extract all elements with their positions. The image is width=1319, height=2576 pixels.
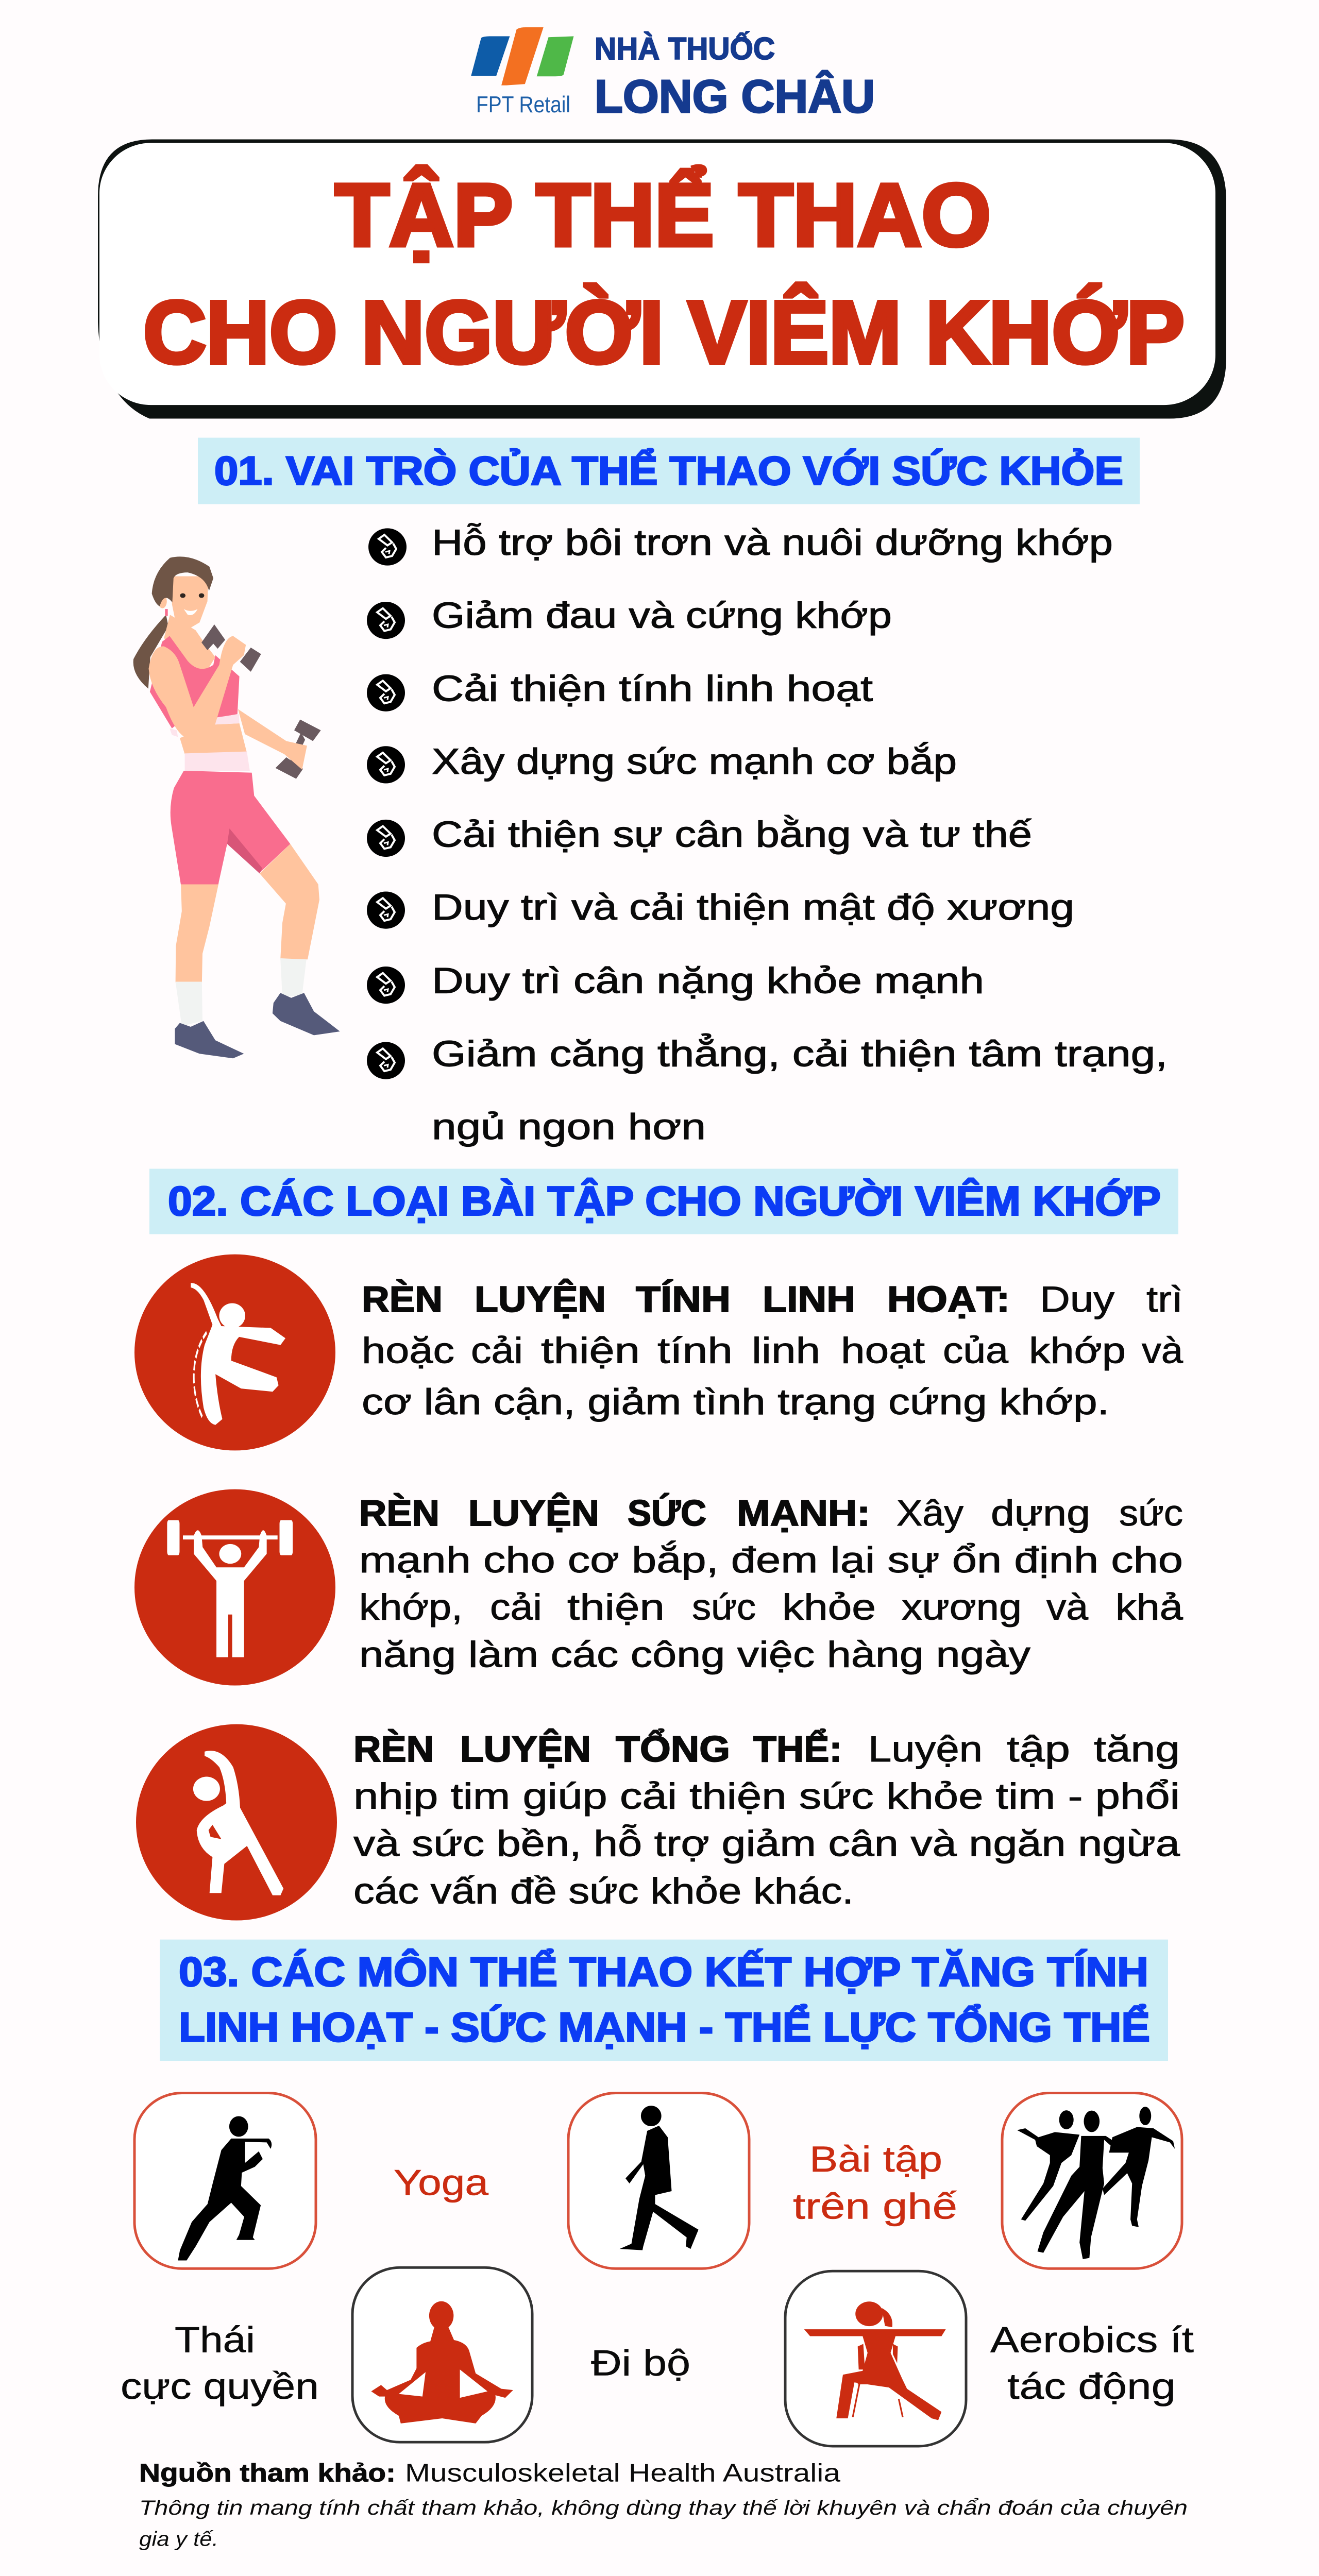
label: tai chi: cực quyền — [121, 2367, 319, 2407]
logo name line 1: NHÀ THUỐC — [595, 31, 775, 66]
text: overall training: tập — [1007, 1730, 1070, 1770]
text: flexibility training: TÍNH — [636, 1280, 731, 1320]
disclaimer: gia y tế. — [139, 2527, 218, 2550]
icon: bullet 2 — [367, 602, 405, 639]
text: flexibility training: cơ lân cận, giảm tình trạng cứng khớp. — [362, 1382, 1109, 1422]
icon: bullet 6 — [367, 891, 405, 929]
icon: bullet 1 — [368, 528, 407, 566]
benefit 8: ngủ ngon hơn — [432, 1107, 706, 1147]
text: flexibility training — [362, 1279, 1183, 1422]
logo: FPT Retail Long Châu — [471, 27, 875, 123]
text: strength training: RÈN — [359, 1494, 439, 1534]
text: strength training: khớp, — [359, 1587, 463, 1628]
heading: section 03 — [160, 1940, 1168, 2061]
text: strength training: sức — [692, 1587, 756, 1628]
label: tai chi: Thái — [175, 2320, 255, 2360]
icon: bullet 7 — [367, 967, 405, 1004]
source note: Nguồn tham khảo: — [139, 2459, 396, 2487]
text: overall training: THỂ: — [753, 1729, 842, 1770]
text: strength training: LUYỆN — [468, 1493, 599, 1534]
label: chair exercise: Bài tập — [809, 2140, 942, 2180]
text: overall training — [353, 1729, 1180, 1911]
illustration: woman with dumbbells — [133, 556, 340, 1058]
benefit 3: Cải thiện tính linh hoạt — [432, 669, 873, 709]
icon: overall fitness — [136, 1724, 337, 1921]
label: chair exercise — [793, 2140, 957, 2227]
heading: section 02 — [149, 1169, 1178, 1234]
benefit 7: Duy trì cân nặng khỏe mạnh — [432, 961, 984, 1002]
benefit 1: Hỗ trợ bôi trơn và nuôi dưỡng khớp — [432, 523, 1113, 563]
text: flexibility training: LUYỆN — [475, 1279, 606, 1320]
text: overall training: nhịp tim giúp cải thiện sức khỏe tim - phổi — [353, 1776, 1180, 1817]
icon: FPT mark — [471, 27, 574, 86]
text: flexibility training: của — [943, 1331, 1008, 1371]
disclaimer: Thông tin mang tính chất tham khảo, không dùng thay thế lời khuyên và chẩn đoán của chuyên — [139, 2496, 1188, 2519]
text: overall training: LUYỆN — [460, 1729, 591, 1770]
text: flexibility training: HOẠT: — [887, 1280, 1010, 1320]
icon: bullet 4 — [367, 746, 405, 784]
heading: section 01: 01. VAI TRÒ CỦA THỂ THAO VỚI SỨC KHỎE — [214, 448, 1123, 493]
text: overall training: và sức bền, hỗ trợ giảm cân và ngăn ngừa — [353, 1824, 1180, 1864]
text: flexibility training: hoạt — [841, 1331, 925, 1371]
text: overall training: tăng — [1094, 1730, 1180, 1770]
text: flexibility training: và — [1142, 1331, 1183, 1371]
icon: strength — [134, 1489, 335, 1685]
text: flexibility training: Duy — [1040, 1280, 1114, 1320]
text: flexibility training: hoặc — [362, 1331, 454, 1371]
label: low impact aerobics: tác động — [1007, 2367, 1176, 2407]
text: strength training: xương — [902, 1587, 1022, 1628]
text: flexibility training: khớp — [1029, 1331, 1126, 1371]
title line 1: TẬP THỂ THAO — [335, 165, 991, 264]
logo sub-label: FPT Retail — [476, 91, 570, 117]
logo name line 2: LONG CHÂU — [595, 71, 875, 123]
text: overall training: Luyện — [868, 1730, 983, 1770]
benefit 5: Cải thiện sự cân bằng và tư thế — [432, 815, 1032, 855]
card: aerobics icon — [1002, 2093, 1182, 2268]
heading: section 01 — [198, 438, 1140, 504]
heading: section 02: 02. CÁC LOẠI BÀI TẬP CHO NGƯỜI VIÊM KHỚP — [168, 1177, 1161, 1224]
list: benefits of exercise — [367, 523, 1168, 1147]
text: overall training: các vấn đề sức khỏe khác. — [353, 1871, 854, 1911]
label: chair exercise: trên ghế — [793, 2187, 957, 2227]
text: strength training: mạnh cho cơ bắp, đem lại sự ổn định cho — [359, 1540, 1183, 1581]
card: yoga meditation icon — [352, 2267, 532, 2442]
label: walking: Đi bộ — [591, 2343, 690, 2383]
icon: bullet 8 — [367, 1042, 405, 1079]
benefit 4: Xây dựng sức mạnh cơ bắp — [432, 742, 957, 782]
text: strength training: năng làm các công việc hàng ngày — [359, 1635, 1030, 1675]
benefit 2: Giảm đau và cứng khớp — [432, 596, 892, 636]
text: flexibility training: tính — [657, 1331, 733, 1371]
icon: flexibility — [134, 1255, 335, 1450]
text: overall training: RÈN — [353, 1730, 434, 1770]
text: strength training: Xây — [897, 1494, 963, 1534]
text: strength training: khả — [1115, 1587, 1183, 1628]
benefit 8 — [432, 1033, 1168, 1147]
text: strength training: MẠNH: — [737, 1494, 870, 1534]
title line 2: CHO NGƯỜI VIÊM KHỚP — [143, 283, 1185, 382]
label: low impact aerobics: Aerobics ít — [990, 2320, 1194, 2360]
label: low impact aerobics — [990, 2320, 1194, 2407]
text: overall training: TỔNG — [616, 1729, 730, 1770]
text: strength training: cải — [490, 1587, 542, 1628]
label: Yoga: Yoga — [394, 2163, 488, 2204]
text: flexibility training: trì — [1146, 1280, 1183, 1320]
card: chair exercise icon — [785, 2271, 966, 2446]
icon: bullet 5 — [367, 820, 405, 857]
text: strength training: khỏe — [782, 1587, 876, 1628]
text: strength training: thiện — [567, 1587, 665, 1628]
text: strength training — [359, 1493, 1183, 1675]
source note — [139, 2459, 841, 2487]
text: strength training: SỨC — [628, 1494, 706, 1534]
text: strength training: dựng — [991, 1494, 1090, 1534]
heading: section 03: LINH HOẠT - SỨC MẠNH - THỂ LỰC TỔNG THỂ — [179, 2004, 1150, 2050]
text: strength training: và — [1046, 1587, 1088, 1628]
icon: bullet 3 — [367, 674, 405, 711]
card: walking icon — [568, 2093, 749, 2268]
benefit 8: Giảm căng thẳng, cải thiện tâm trạng, — [432, 1033, 1168, 1074]
heading: section 03: 03. CÁC MÔN THỂ THAO KẾT HỢP TĂNG TÍNH — [179, 1948, 1148, 1995]
text: flexibility training: thiện — [541, 1331, 640, 1371]
text: flexibility training: cải — [471, 1331, 523, 1371]
text: strength training: sức — [1119, 1494, 1183, 1534]
card: tai chi icon — [134, 2093, 316, 2268]
text: flexibility training: RÈN — [362, 1280, 443, 1320]
text: flexibility training: linh — [752, 1331, 820, 1371]
source note: Musculoskeletal Health Australia — [405, 2459, 841, 2487]
title panel — [98, 140, 1226, 418]
benefit 6: Duy trì và cải thiện mật độ xương — [432, 888, 1074, 928]
label: tai chi — [121, 2320, 319, 2407]
text: flexibility training: LINH — [763, 1280, 855, 1320]
disclaimer — [139, 2496, 1188, 2550]
